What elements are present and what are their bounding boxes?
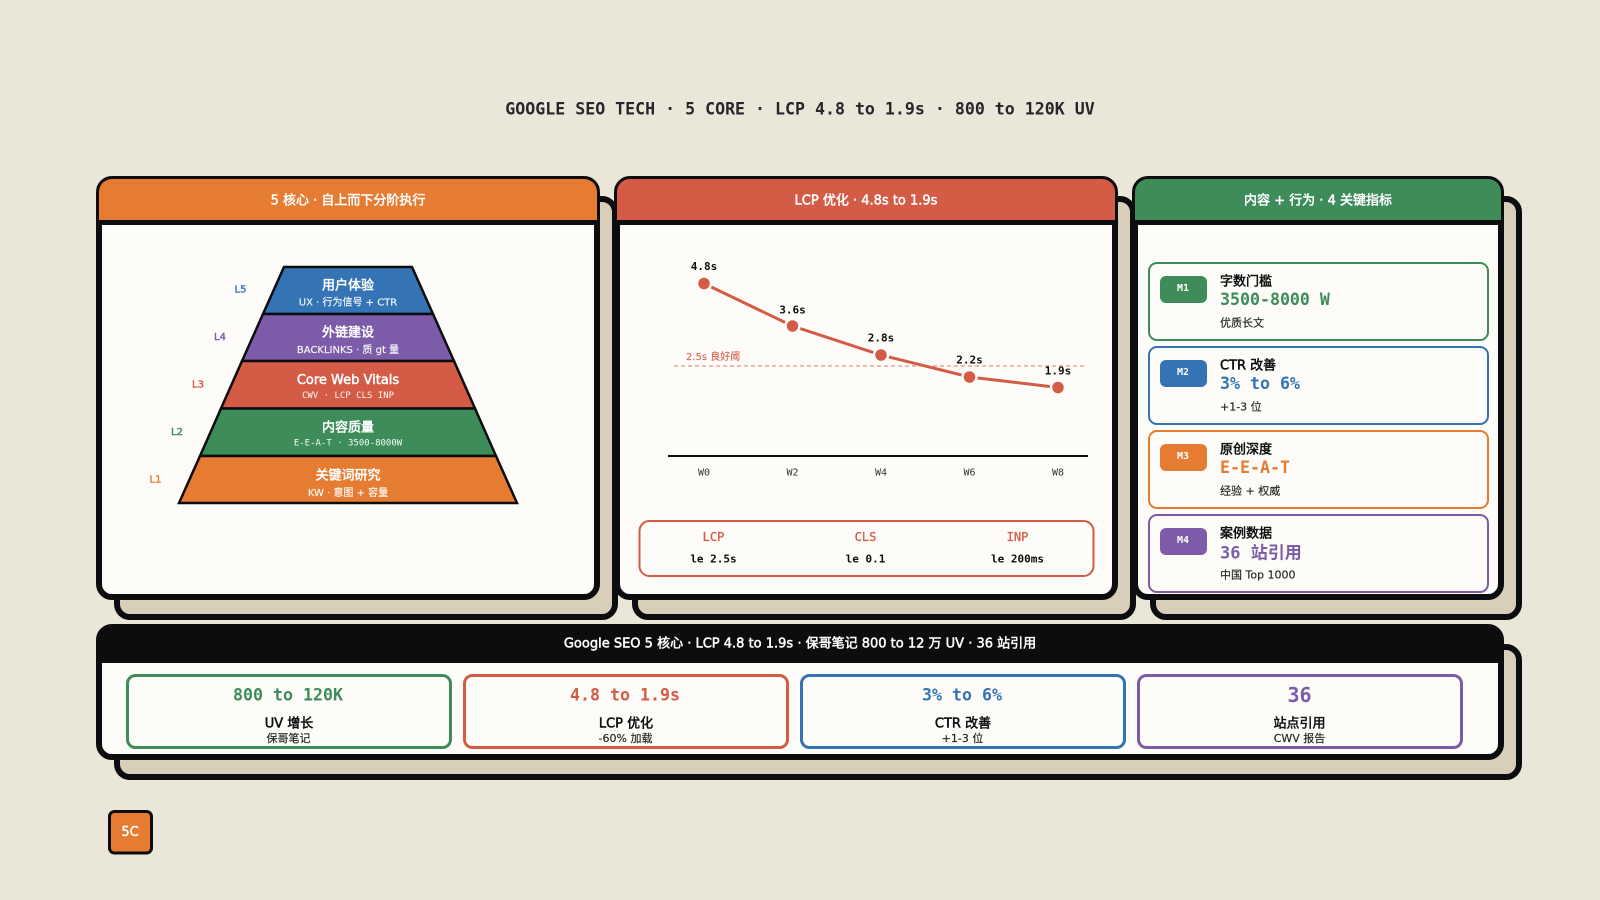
stat card: site citations: 站点引用 (1273, 716, 1326, 732)
layer L2: L2 (171, 427, 183, 438)
stat card: CTR improvement (802, 676, 1124, 748)
stat card: site citations: CWV 报告 (1274, 731, 1325, 745)
callout: CWV thresholds: INP (1007, 530, 1028, 544)
layer L5: UX · 行为信号 + CTR (299, 296, 397, 308)
metric card M4: 36 站引用 (1220, 544, 1302, 564)
chart: LCP line chart: 1.9s (1045, 364, 1071, 378)
chart: LCP line chart: 2.2s (956, 354, 983, 366)
chart: LCP line chart: W2 (786, 468, 799, 478)
panel: pyramid of 5 core layers (99, 179, 615, 617)
panel: LCP optimisation (617, 179, 1133, 617)
metric card M3: 原创深度 (1220, 442, 1272, 458)
layer L4: L4 (214, 332, 226, 343)
heading: LCP panel: LCP 优化 · 4.8s to 1.9s (795, 194, 938, 208)
stat card: CTR improvement: +1-3 位 (942, 731, 983, 745)
metric card M1: M1 (1177, 283, 1189, 294)
callout: CWV thresholds: le 200ms (991, 552, 1044, 566)
heading: summary strip: Google SEO 5 核心 · LCP 4.8 to 1.9s · 保哥笔记 800 to 12 万 UV · 36 站引用 (564, 636, 1036, 652)
heading: metrics panel: 内容 + 行为 · 4 关键指标 (1244, 192, 1392, 208)
callout: CWV thresholds: LCP (703, 530, 724, 544)
metric card M2: 3% to 6% (1220, 374, 1300, 393)
layer L5: 用户体验 (322, 278, 374, 294)
layer L4: 外链建设 (322, 326, 374, 340)
stat card: UV growth: UV 增长 (265, 716, 313, 732)
callout: CWV thresholds: CLS (855, 530, 876, 544)
chart: LCP line chart: 4.8s (691, 260, 717, 273)
chart: LCP line chart: 2.5s 良好阈 (686, 350, 740, 363)
stat card: LCP optimisation (464, 676, 788, 748)
panel: summary strip (99, 627, 1519, 777)
metric card M2: M2 (1177, 367, 1189, 378)
chart: LCP line chart: W4 (875, 468, 887, 478)
stat card: LCP optimisation: 4.8 to 1.9s (570, 686, 680, 704)
metric card M4 (1149, 515, 1488, 592)
chart: pyramid (150, 267, 517, 503)
metric card M1 (1149, 263, 1488, 340)
chart: LCP line chart: W8 (1052, 468, 1064, 478)
chart: LCP line chart: W6 (963, 468, 976, 478)
title: GOOGLE SEO TECH · 5 CORE · LCP 4.8 to 1.9s · 800 to 120K UV (505, 100, 1095, 118)
stat card: CTR improvement: CTR 改善 (935, 716, 991, 732)
layer L3 (192, 361, 475, 408)
layer L5: L5 (235, 284, 246, 296)
layer L1 (150, 456, 517, 503)
layer L5 (235, 267, 433, 314)
chart: LCP line chart: 3.6s (779, 304, 806, 316)
stat card: UV growth: 800 to 120K (233, 686, 343, 704)
metric card M4: 中国 Top 1000 (1220, 568, 1296, 582)
metric card M1: 3500-8000 W (1220, 290, 1330, 309)
layer L3: CWV · LCP CLS INP (302, 391, 395, 401)
chart: LCP line chart: 2.8s (868, 332, 894, 344)
layer L1: 关键词研究 (315, 468, 381, 484)
metric card M4: M4 (1177, 535, 1189, 546)
badge: 5C (110, 812, 152, 853)
metric card M2: +1-3 位 (1220, 400, 1262, 414)
stat card: site citations (1138, 676, 1462, 748)
stat card: UV growth: 保哥笔记 (266, 731, 310, 745)
metric card M3: E-E-A-T (1220, 458, 1290, 477)
metric card M1: 字数门槛 (1220, 274, 1272, 290)
stat card: UV growth (128, 676, 450, 748)
layer L2: E-E-A-T · 3500-8000W (294, 438, 403, 448)
layer L1: L1 (150, 474, 161, 486)
layer L1: KW · 意图 + 容量 (308, 486, 388, 499)
metric card M4: 案例数据 (1220, 526, 1272, 542)
stat card: LCP optimisation: LCP 优化 (599, 716, 653, 732)
metric card M3 (1149, 431, 1488, 508)
layer L3: Core Web Vitals (297, 373, 399, 388)
layer L2: 内容质量 (322, 420, 374, 436)
callout: CWV thresholds: le 0.1 (846, 552, 886, 566)
metric card M3: 经验 + 权威 (1220, 484, 1280, 498)
layer L4: BACKLINKS · 质 gt 量 (297, 344, 399, 356)
metric card M1: 优质长文 (1220, 316, 1264, 330)
chart: LCP line chart (668, 260, 1088, 478)
metric card M3: M3 (1177, 451, 1189, 462)
metric card M2: CTR 改善 (1220, 358, 1276, 374)
layer L4 (214, 314, 454, 361)
stat card: CTR improvement: 3% to 6% (922, 686, 1002, 704)
stat card: LCP optimisation: -60% 加载 (599, 732, 652, 745)
stat card: site citations: 36 (1287, 683, 1312, 707)
callout: CWV thresholds (640, 521, 1094, 576)
layer L2 (171, 408, 496, 456)
callout: CWV thresholds: le 2.5s (690, 552, 737, 566)
layer L3: L3 (192, 380, 204, 390)
heading: pyramid panel: 5 核心 · 自上而下分阶执行 (271, 194, 425, 208)
chart: LCP line chart: W0 (698, 468, 710, 478)
panel: four key metrics (1135, 179, 1519, 617)
badge: 5C: 5C (121, 825, 139, 840)
metric card M2 (1149, 347, 1488, 424)
